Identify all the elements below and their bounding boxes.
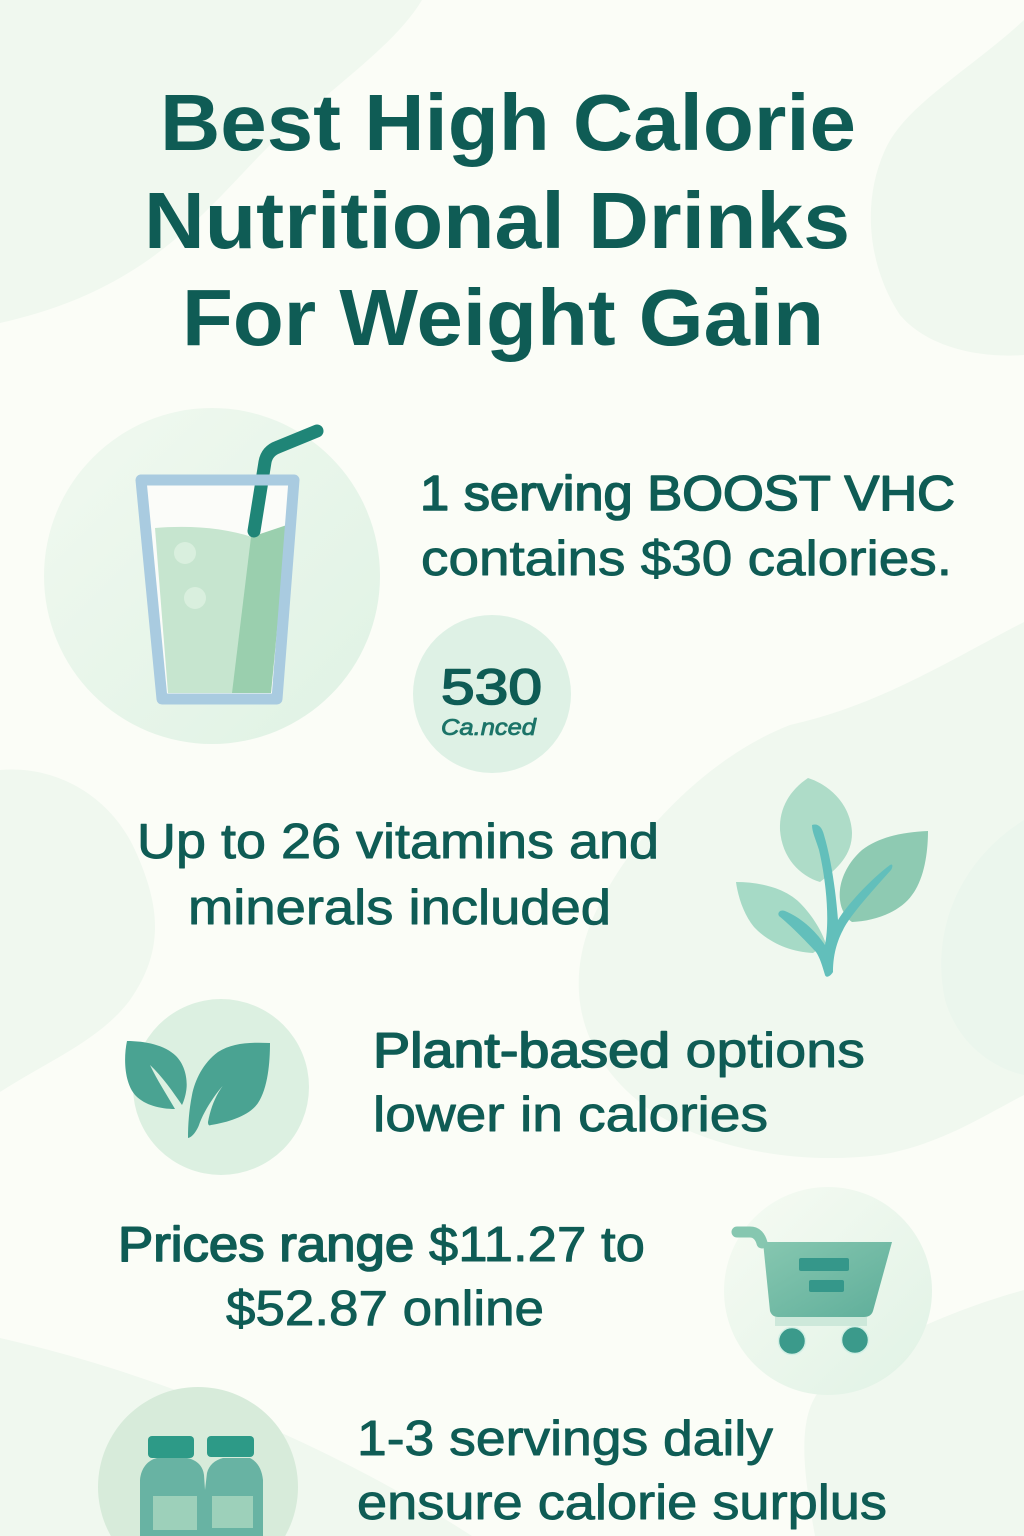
- bottle labels: [153, 1496, 253, 1530]
- left leaf: [125, 1041, 187, 1109]
- left leaf: [736, 882, 826, 953]
- text: serving: [420, 467, 955, 586]
- cart handle: [737, 1232, 762, 1243]
- title: [144, 78, 856, 362]
- bottles circle: [98, 1387, 298, 1536]
- text: servings: 1-3 servings daily: [357, 1412, 774, 1466]
- text: serving: contains $30 calories.: [421, 532, 952, 586]
- text: prices: Prices range $11.27 to: [118, 1218, 645, 1272]
- cart shadow: [775, 1317, 867, 1326]
- leaves circle: [133, 999, 309, 1175]
- bubbles: [174, 542, 206, 609]
- glass background circle: [44, 408, 380, 744]
- glass outline: [141, 480, 294, 699]
- right leaf: [188, 1043, 270, 1138]
- straw: [254, 431, 317, 531]
- text: vitamins: Up to 26 vitamins and: [137, 815, 659, 869]
- icon: shopping cart: [724, 1187, 932, 1395]
- text: prices: $52.87 online: [226, 1282, 544, 1336]
- text: servings: [357, 1412, 887, 1530]
- text: serving: 1 serving BOOST VHC: [420, 467, 955, 521]
- cart circle: [724, 1187, 932, 1395]
- cart slots: [799, 1258, 849, 1292]
- badge: 530 calories: 530: [441, 659, 542, 715]
- secondary blob tint: [941, 820, 1024, 1075]
- cart basket: [763, 1242, 892, 1317]
- stems: [778, 824, 892, 977]
- text: vitamins: minerals included: [188, 881, 611, 935]
- title: Nutritional Drinks: [144, 176, 850, 265]
- badge: 530 calories: [413, 615, 571, 773]
- icon: leaves in circle: [125, 999, 309, 1175]
- glass empty interior: [141, 481, 294, 698]
- drink dark side: [232, 525, 287, 693]
- text: vitamins: [137, 815, 659, 935]
- text: prices: [118, 1218, 645, 1336]
- text: plant-based: lower in calories: [373, 1088, 768, 1142]
- right leaf: [840, 831, 928, 922]
- bottle caps: [148, 1436, 254, 1458]
- title: For Weight Gain: [182, 273, 824, 362]
- text: servings: ensure calorie surplus: [357, 1476, 887, 1530]
- text: plant-based: Plant-based options: [373, 1024, 865, 1078]
- badge: 530 calories: Ca.nced: [441, 714, 537, 740]
- icon: bottles: [98, 1387, 298, 1536]
- icon: plant sprig: [736, 778, 928, 977]
- panel: glass icon: [44, 408, 380, 744]
- text: plant-based: [373, 1024, 865, 1142]
- title: Best High Calorie: [160, 78, 856, 167]
- bottle bodies: [140, 1458, 263, 1536]
- cart wheels: [778, 1326, 868, 1354]
- drink light: [155, 525, 287, 693]
- top leaf: [780, 778, 852, 882]
